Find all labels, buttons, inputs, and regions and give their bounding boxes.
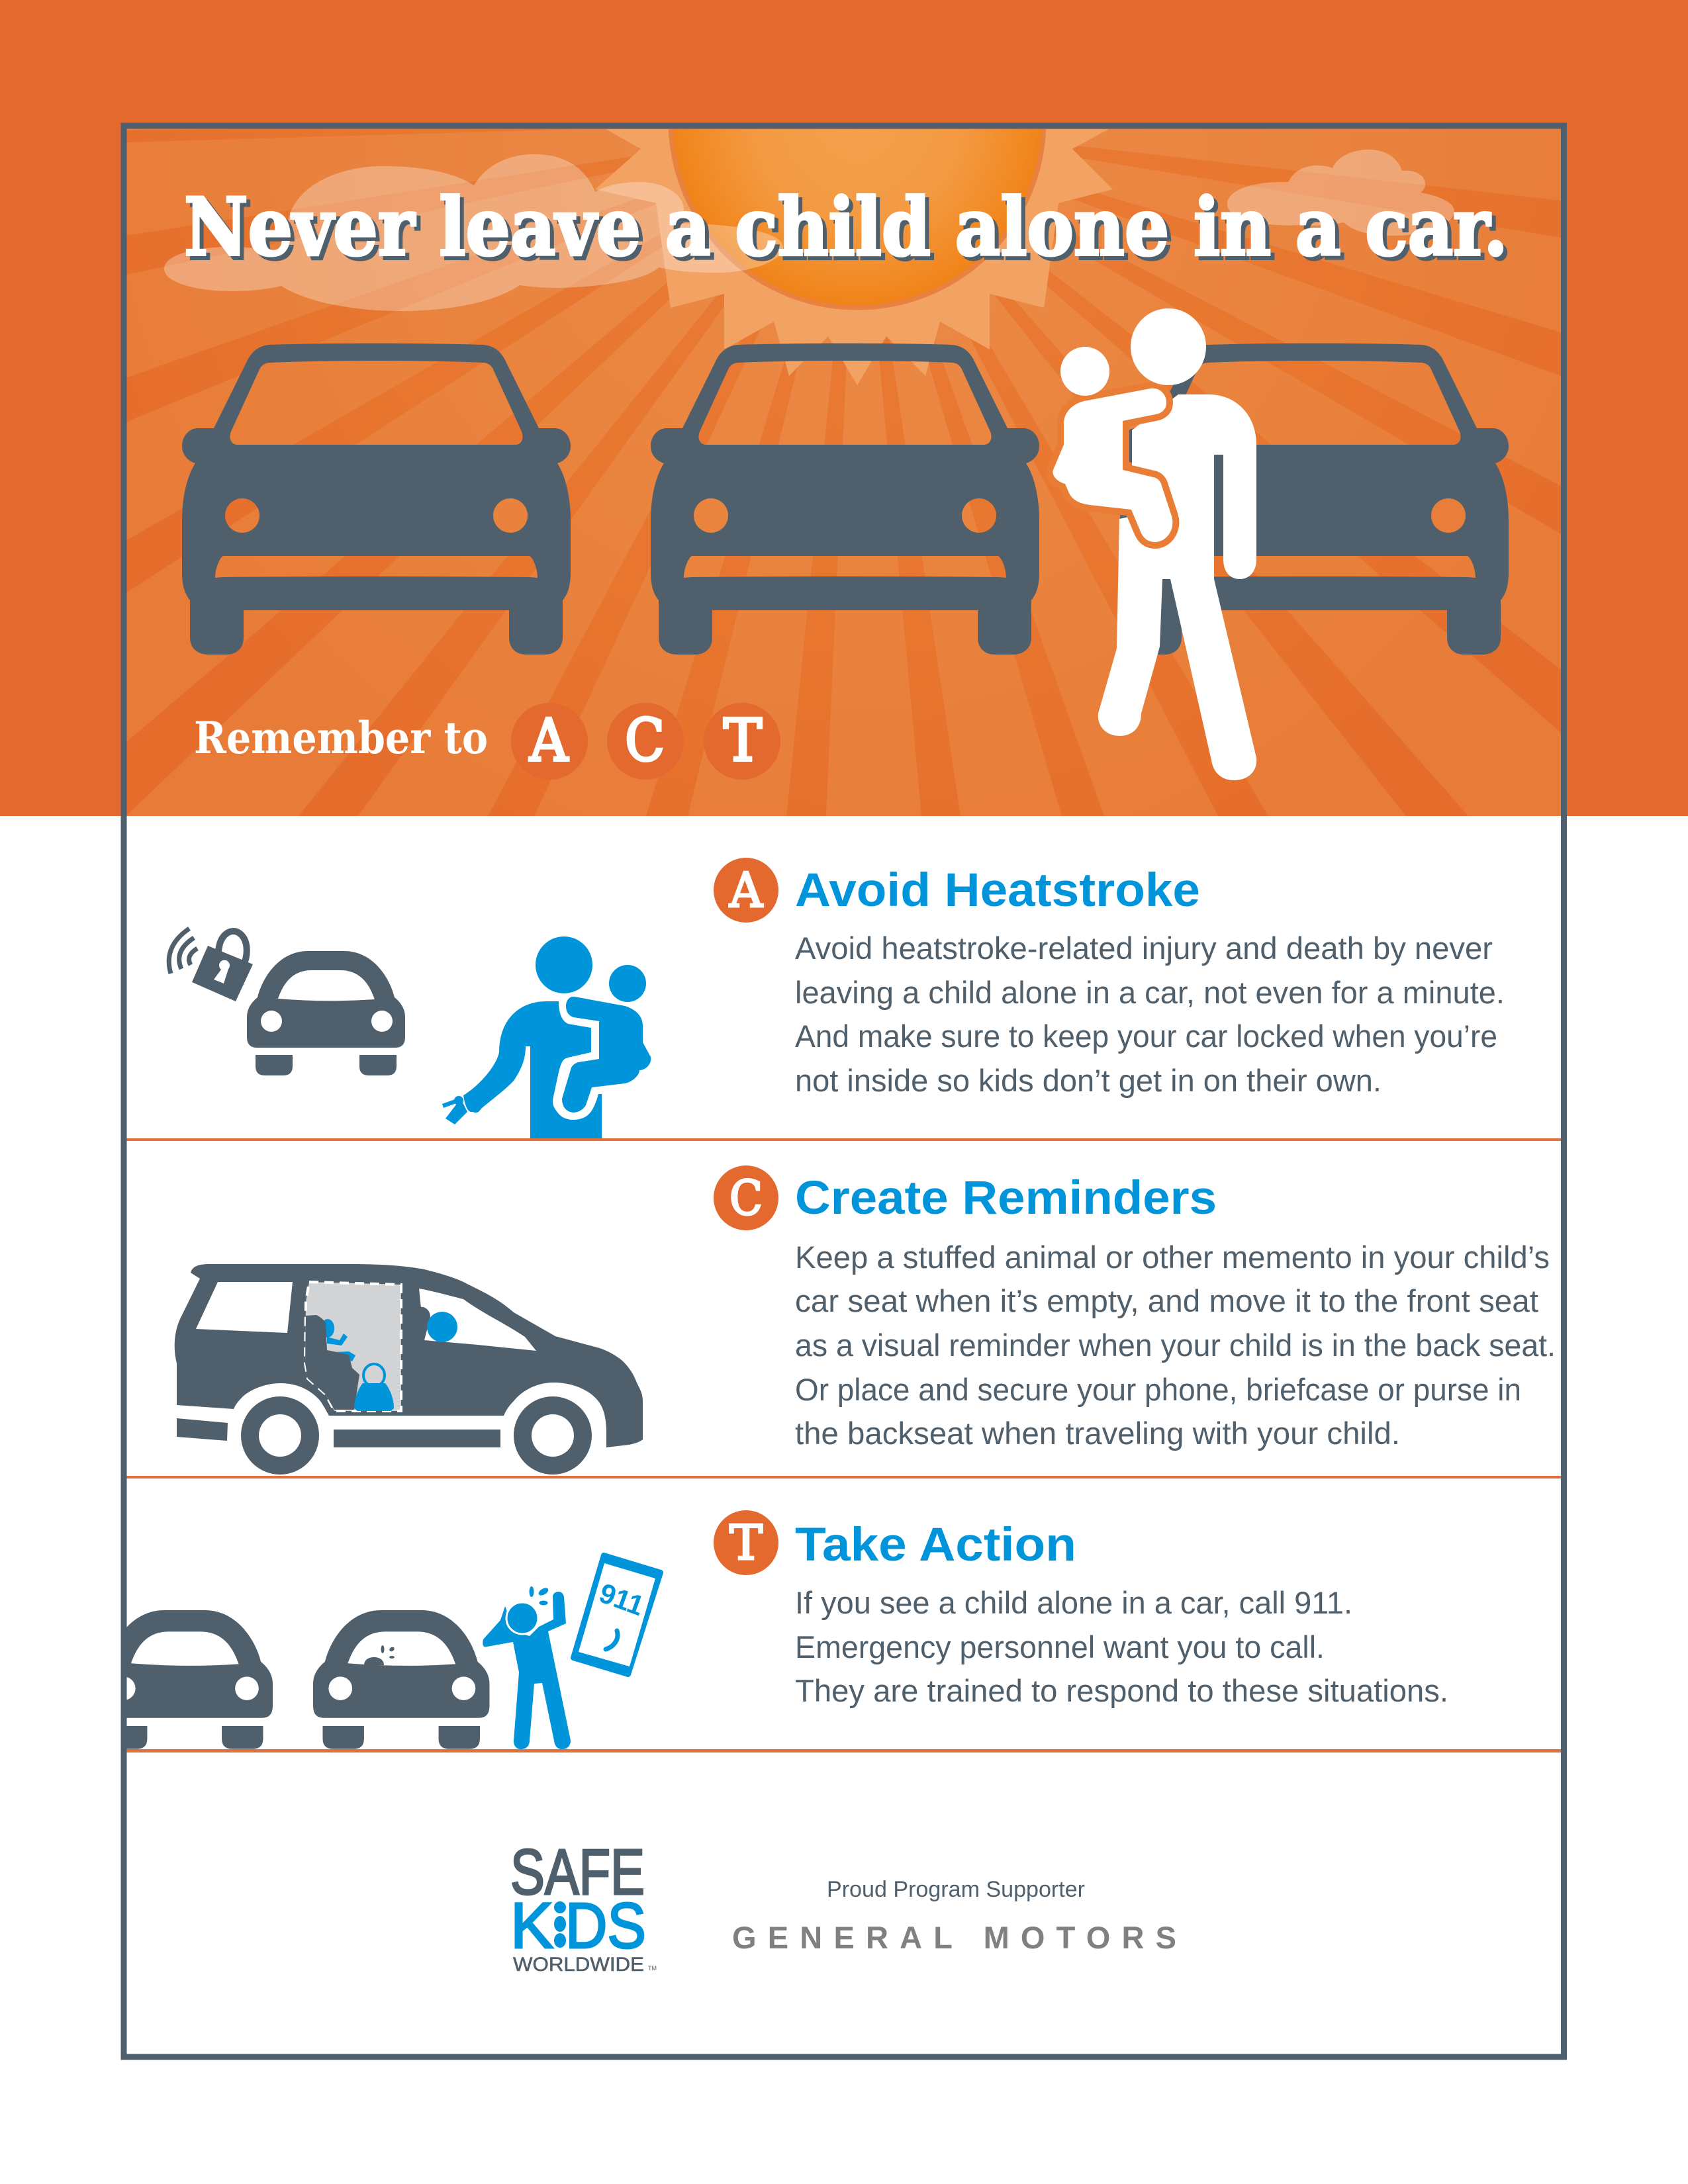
badge T <box>704 703 780 780</box>
purse <box>354 1364 394 1411</box>
badge C <box>714 1165 778 1230</box>
divider <box>126 1749 1561 1752</box>
driver head <box>427 1312 457 1342</box>
sun rays background <box>126 121 1561 816</box>
logo: Safe Kids Worldwide: SAFE <box>510 1836 645 1908</box>
text block <box>795 1240 1556 1451</box>
icon: padlock <box>192 931 253 1001</box>
text block: Or place and secure your phone, briefcase or purse in <box>795 1372 1521 1407</box>
title: Never leave a child alone in a car. <box>184 181 1508 274</box>
text block: car seat when it’s empty, and move it to the front seat <box>795 1283 1538 1318</box>
supporter label: Proud Program Supporter <box>827 1877 1085 1902</box>
divider <box>126 1138 1561 1141</box>
front window <box>419 1289 536 1351</box>
heading: Take Action <box>795 1519 1076 1571</box>
adult body <box>1098 394 1256 780</box>
frame border <box>124 126 1564 2057</box>
child seat <box>305 1315 359 1410</box>
front wheel <box>514 1396 592 1475</box>
icon: parent carrying child with keys <box>442 936 651 1138</box>
badge A: A <box>529 706 569 774</box>
figure: adult carrying child <box>1053 308 1256 780</box>
handset glyph <box>606 1631 618 1649</box>
divider <box>126 1476 1561 1479</box>
badge A <box>714 858 778 923</box>
icon: phone 911 <box>573 1555 661 1674</box>
text block: Avoid heatstroke-related injury and death by never <box>795 931 1493 966</box>
text block: the backseat when traveling with your child. <box>795 1416 1400 1451</box>
badge T: T <box>724 706 762 774</box>
badge T: T <box>729 1515 763 1570</box>
child head in window <box>364 1657 384 1665</box>
icon: van with back seat view <box>175 1264 643 1475</box>
icon: car cropped at frame <box>127 1610 273 1749</box>
panel: create reminders <box>126 1165 1561 1479</box>
badge C: C <box>625 706 665 774</box>
small car <box>247 951 405 1075</box>
icon: locked car <box>169 929 405 1075</box>
child body with outline <box>1053 388 1172 542</box>
sponsor name: GENERAL MOTORS <box>732 1920 1176 1955</box>
text block <box>795 1585 1448 1708</box>
logo: Safe Kids Worldwide: K <box>510 1889 553 1962</box>
panel: hero scene <box>127 129 1561 816</box>
rear bumper <box>177 1418 228 1441</box>
text block: Emergency personnel want you to call. <box>795 1629 1325 1664</box>
text block: They are trained to respond to these situations. <box>795 1673 1448 1708</box>
badge A <box>511 703 588 780</box>
text block: leaving a child alone in a car, not even for a minute. <box>795 975 1505 1010</box>
person body <box>483 1592 571 1749</box>
logo: Safe Kids Worldwide: DS <box>565 1889 646 1962</box>
badge T <box>714 1510 778 1575</box>
sun <box>595 129 1113 385</box>
text block: as a visual reminder when your child is in the back seat. <box>795 1328 1556 1363</box>
heading: Create Reminders <box>795 1172 1217 1224</box>
car: right <box>1120 343 1509 655</box>
text block: And make sure to keep your car locked when you’re <box>795 1019 1497 1054</box>
rear wheel <box>241 1396 319 1475</box>
side sill <box>334 1430 500 1447</box>
car: left <box>182 343 571 655</box>
text block: If you see a child alone in a car, call 911. <box>795 1585 1352 1620</box>
cloud right <box>1227 150 1454 236</box>
keys <box>442 1099 467 1124</box>
remember to ACT <box>194 703 780 780</box>
door panel <box>305 1282 401 1411</box>
logo: Safe Kids Worldwide <box>510 1836 657 1976</box>
911 label: 911 <box>595 1577 648 1621</box>
logo: Safe Kids Worldwide: TM <box>648 1965 657 1972</box>
person head <box>506 1602 538 1634</box>
orange top band <box>0 0 1688 816</box>
adult head <box>1131 308 1206 385</box>
driver seat <box>419 1307 430 1340</box>
cloud left <box>164 154 783 311</box>
icon: car with child inside <box>313 1610 489 1749</box>
heading: Avoid Heatstroke <box>795 864 1200 917</box>
badge C: C <box>729 1170 763 1226</box>
parent head <box>536 936 592 993</box>
badge C <box>607 703 684 780</box>
car: middle <box>651 343 1039 655</box>
remember to label: Remember to <box>194 712 488 764</box>
text block: not inside so kids don’t get in on their own. <box>795 1063 1382 1098</box>
text block <box>795 931 1505 1098</box>
baby in seat <box>321 1319 355 1361</box>
logo: Safe Kids Worldwide: WORLDWIDE <box>513 1954 644 1976</box>
sweat drops <box>530 1586 549 1606</box>
parent body <box>463 1001 602 1138</box>
badge A: A <box>729 862 763 918</box>
icon: person calling <box>483 1586 571 1749</box>
panel: take action <box>97 1510 1561 1752</box>
sweat drops <box>381 1645 395 1659</box>
text block: Keep a stuffed animal or other memento in your child’s <box>795 1240 1550 1275</box>
van body <box>175 1264 643 1447</box>
panel: avoid heatstroke <box>126 858 1561 1141</box>
icon: remote signal <box>169 929 197 974</box>
rear window <box>196 1282 293 1333</box>
child head <box>1060 347 1109 396</box>
title: Never leave a child alone in a car. <box>188 185 1512 278</box>
child body <box>562 997 651 1113</box>
child head <box>609 965 646 1002</box>
